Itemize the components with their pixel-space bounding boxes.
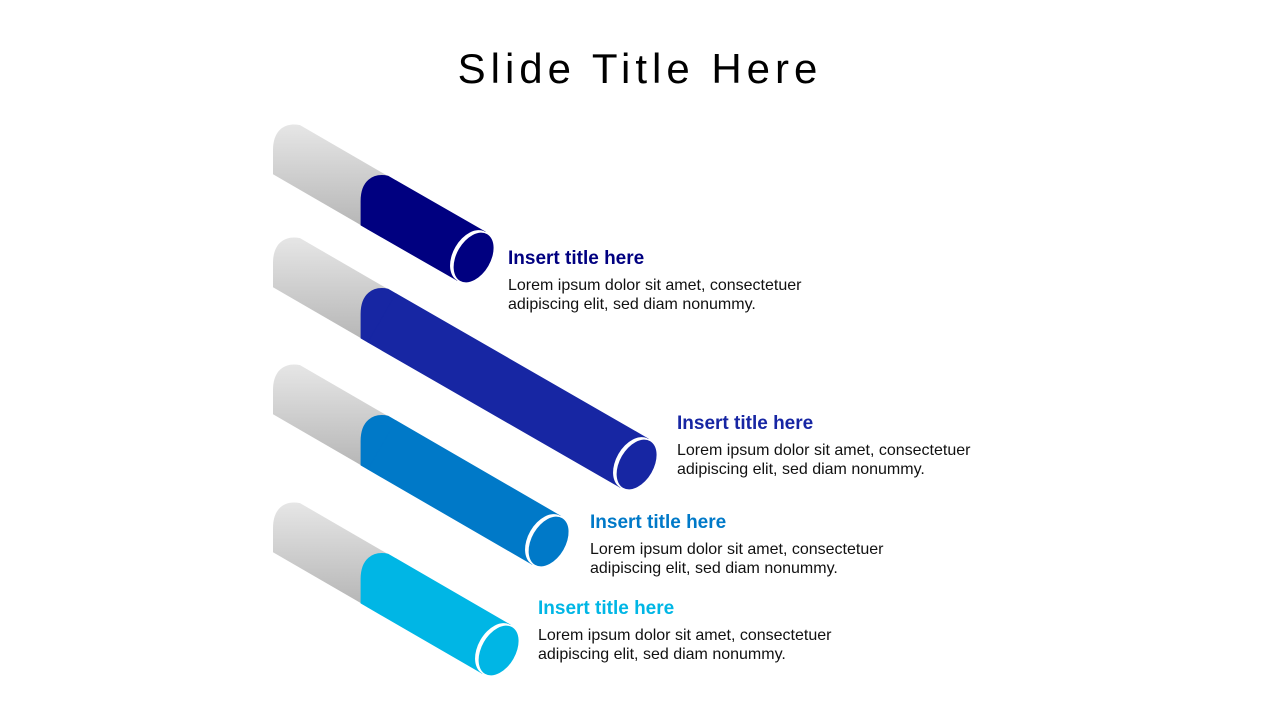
heading 1: Insert title here bbox=[508, 248, 644, 269]
body 3: Lorem ipsum dolor sit amet, consectetuer bbox=[590, 541, 883, 558]
text block 1 bbox=[508, 248, 802, 313]
text block 3 bbox=[590, 512, 884, 577]
body 1: Lorem ipsum dolor sit amet, consectetuer bbox=[508, 277, 801, 294]
text block 2 bbox=[677, 413, 970, 478]
text block 4 bbox=[538, 598, 832, 663]
body 2 bbox=[677, 442, 970, 478]
heading 2: Insert title here bbox=[677, 413, 813, 434]
title: Slide Title Here bbox=[458, 45, 822, 92]
heading 4: Insert title here bbox=[538, 598, 674, 619]
heading 3: Insert title here bbox=[590, 512, 726, 533]
body 3 bbox=[590, 541, 884, 577]
cylinder 1 bbox=[273, 124, 502, 289]
cylinder 2 bbox=[273, 237, 665, 496]
body 1 bbox=[508, 277, 802, 313]
body 1: adipiscing elit, sed diam nonummy. bbox=[508, 296, 756, 313]
cylinder 4 bbox=[273, 502, 527, 682]
body 4: Lorem ipsum dolor sit amet, consectetuer bbox=[538, 627, 831, 644]
body 3: adipiscing elit, sed diam nonummy. bbox=[590, 560, 838, 577]
body 4 bbox=[538, 627, 832, 663]
cylinder 3 bbox=[273, 364, 577, 573]
body 4: adipiscing elit, sed diam nonummy. bbox=[538, 646, 786, 663]
body 2: Lorem ipsum dolor sit amet, consectetuer bbox=[677, 442, 970, 459]
body 2: adipiscing elit, sed diam nonummy. bbox=[677, 461, 925, 478]
